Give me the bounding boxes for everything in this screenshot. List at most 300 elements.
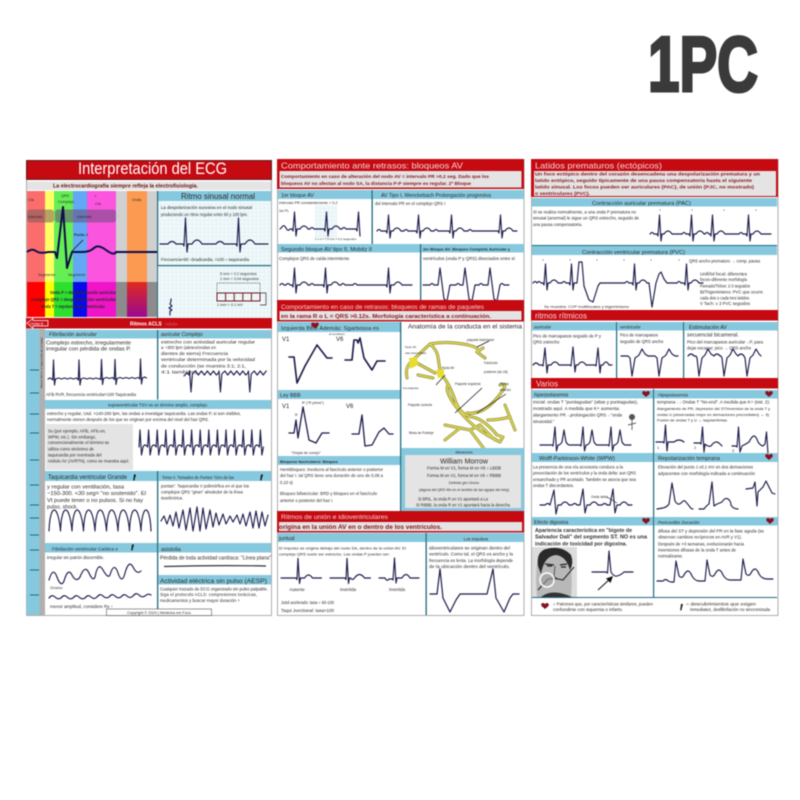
panel: PAC: Contracción auricular prematura (PAC): [592, 201, 691, 207]
trace: LBBB V6: [345, 338, 385, 370]
panel: Taquicardia ventricular: [45, 471, 157, 531]
panel: Efecto digoxina: Efecto digoxina: [534, 520, 568, 526]
panel: Izquierda BBB: V1: [282, 337, 290, 343]
arrow: back tab: [27, 318, 48, 328]
chart: ECG wave segments: Segmento: [38, 273, 55, 277]
trace: RBBB V6: [352, 415, 393, 446]
panel: William Morrow: Si RBBB, la onda R en V1 apuntará hacia la derecha: [416, 502, 511, 508]
trace: ventricular tachycardia: [49, 510, 151, 531]
trace: junctional inverted P after: [330, 558, 370, 584]
panel: Ley BBB: V6: [346, 404, 354, 410]
panel: Anatomía del sistema de conducción: posterior (de LB): [484, 370, 508, 374]
panel: juntual: Taqui Junctional: tasa>100: [281, 608, 335, 613]
legend: confundirse con isquemia o infarto.: [553, 607, 623, 612]
panel: Hipopotasemia: Alargamiento de PR, depresión del ST/inversión de la onda T y: [657, 407, 770, 411]
panel: AV Tipo I Wenckebach: del intervalo PR en el complejo QRS I: [375, 201, 445, 206]
panel: PVC: Unifi/lol focal: diferentes: [700, 272, 747, 276]
subtitle strip: La electrocardiografía siempre refleja la electrofisiología.: [53, 184, 199, 190]
panel: Pericarditis: [654, 517, 778, 582]
panel: Segundo bloque Mobitz II: Segundo bloque AV tipo II, Mobitz II: [281, 247, 372, 253]
heading: bloqueos de ramas de paquetes: [277, 300, 524, 322]
footer: copyright: [106, 609, 212, 616]
arrow: back tab: Ondas B: [30, 322, 44, 326]
title: 1PC: 1PC: [648, 20, 758, 108]
panel: marcapasos ventricular: ventricular: [620, 324, 641, 330]
trace: fine VF: [49, 594, 151, 599]
sidebar: [26, 329, 45, 615]
trace: pericarditis: [657, 559, 773, 582]
icon: heart: [642, 391, 650, 397]
panel: PVC: Pareado/Tiritos: 2-3 seguidos: [700, 284, 750, 288]
chart: ECG wave segments: Intervalo: [28, 215, 43, 219]
panel: Bloqueos fasciculares: Bloqueo bifascicular: BRD y bloqueo en el fascículo: [280, 491, 378, 496]
panel: Fibrilación ventricular: Fibrilación ventricular Caótica e: [52, 546, 119, 552]
subtitle strip: [27, 182, 271, 190]
trace: LBBB V1: [289, 345, 332, 383]
heading: bloqueos AV: [277, 159, 524, 189]
trace: coarse VF: [49, 564, 141, 584]
panel: Ley BBB: R' ("R prime"): [302, 401, 324, 405]
panel: Anatomía del sistema de conducción: Nodo AV: [442, 366, 455, 370]
panel: Bloqueos fasciculares: del haz I. tal QRS tiene una duración de uno de 0,08 a: [280, 473, 384, 478]
panel: PVC: Bi/Trigeminismo: PVC que ocurre: [700, 290, 764, 294]
panel: Anatomía del sistema de conducción: Paquete izquierdo: [455, 382, 481, 386]
trace: PVC: [533, 262, 703, 307]
panel: Ritmo sinusal normal: produciendo un ritmo regular entre 60 y 100 lpm.: [161, 212, 248, 217]
panel: PVC: Contracción ventricular prematura (PVC): [582, 250, 685, 256]
panel: Anatomía del sistema de conducción: los paquete: [403, 386, 419, 390]
panel: William Morrow: Forma M en V1, forma M en V6 = LBDB: [427, 466, 501, 470]
panel: Efecto digoxina: Salvador Dalí" del segmento ST. NO es una: [535, 534, 647, 540]
heading: Ritmos de unión e idioventriculares: [277, 511, 524, 532]
heading: bloqueos de ramas de paquetes: en la rama R o L = QRS >0.12s. Morfología característica a continuación.: [281, 314, 491, 320]
panel: Bloqueos fasciculares: 0,10 s): [280, 480, 293, 485]
icon: lightning: [133, 474, 136, 480]
panel: PAC: Si se realiza normalmente, a una onda P prematura no: [533, 210, 637, 214]
footer: copyright: Copyright © 2024 | Medicina em Foco: [127, 611, 191, 615]
panel: hiperpotasemia: [532, 390, 653, 451]
heading: bloqueos AV: bloqueos AV no afectan al nodo SA, la distancia P-P siempre es regular. 2º Bloque: [281, 181, 471, 186]
trace: atrial fibrillation: [48, 359, 146, 385]
panel: Ley BBB: Ley BBB: [280, 393, 301, 399]
panel: ECG paper scale: [158, 265, 271, 318]
panel: Ritmo sinusal normal: [157, 191, 271, 318]
panel: PVC: cada dos o cada tres latidos.: [700, 296, 750, 300]
heading: bloqueos AV: Comportamiento ante retrasos: bloqueos AV: [281, 160, 463, 170]
trace: junctional absent P: [281, 558, 322, 584]
panel: 1er bloque AV: 1 x s = 7,5 mm = 0,2 segundos: [315, 237, 357, 241]
chart: wave legend strip: Onda T = repolarización ventricular: [41, 304, 105, 309]
icon: heart: [766, 518, 774, 524]
panel: Torsades de Puntes: puntas". Taquicardia V polimórfica en el que los: [161, 484, 249, 488]
panel: Estimulación AV: [684, 322, 778, 376]
panel: 1er bloque AV: [278, 190, 372, 241]
panel: asistolia: Pérdida de toda actividad cardíaca: "Línea plana": [160, 556, 271, 562]
panel: marcapasos auricular: Pico de marcapasos seguido de P y: [533, 334, 602, 338]
panel: WPW: Wolff-Parkinson-White (WPW): [539, 456, 615, 462]
panel: Comportamiento ante retrasos: [277, 159, 524, 616]
panel: idioventriculares: idioventriculares se originan dentro del: [429, 546, 510, 550]
panel: Hipopotasemia: Fusión de ondas T y U → taquiarritmias: [657, 418, 727, 422]
panel: Anatomía del sistema de conducción: anterior: [500, 388, 512, 392]
panel: Anatomía del sistema de conducción: paquete bachmann: [467, 338, 495, 342]
heading: Latidos prematuros: latido ectópico, seguido típicamente de una pausa compensatoria hasta el siguiente: [535, 178, 752, 184]
panel: Anatomía del sistema de conducción: [403, 324, 523, 450]
panel: PAC: una pausa compensatoria.: [533, 222, 582, 227]
panel: Ritmo sinusal normal: La despolarización sucesiva en el nodo sinusal: [161, 205, 252, 210]
panel: Bloqueos fasciculares: Bloqueos fasciculares: Bloqueo: [280, 460, 338, 464]
panel: Ley BBB: "Orejas de conejo": [291, 451, 321, 455]
panel: hiperpotasemia: hiperpotasemia: [534, 392, 568, 398]
panel: PVC: [532, 246, 777, 309]
trace: complete block: [423, 268, 509, 301]
panel: Torsades de Puntes: Torsa V. Torsades de Puntes "Giro de las: [162, 475, 234, 480]
panel: idioventriculares: de la ubicación dentro del ventrículo.: [429, 564, 510, 569]
panel: Taquicardia ventricular: ~150-300. <30 seg= "no sostenido". El: [47, 491, 146, 497]
panel: 3er bloque AV: [422, 244, 524, 301]
panel: Latidos prematuros: [531, 159, 778, 616]
panel: AV Tipo I Wenckebach: [373, 190, 524, 238]
panel: Anatomía del sistema de conducción: Nodo SA: [405, 345, 416, 349]
panel: marcapasos auricular: [532, 322, 616, 373]
panel: Hipopotasemia: 1: [657, 446, 659, 450]
panel: asistolia: asistolia: [161, 547, 182, 553]
panel: marcapasos auricular: auricular: [534, 324, 552, 330]
panel: Estimulación AV: dejar escapar; pico → QRS ancho: [687, 346, 752, 350]
trace: atrial flutter: [184, 371, 266, 392]
panel: Actividad eléctrica sin pulso: Cualquier trazado de ECG organizado sin pulso palpable.: [160, 586, 268, 592]
image: Dalí face: [532, 547, 577, 597]
sidebar: Ritmos ACLS no taquicardia de complejo: [40, 337, 44, 388]
panel: WPW: [532, 453, 653, 514]
panel: Izquierda BBB: [278, 322, 400, 383]
panel: Hipopotasemia: temprana : ↓ Ondas T "No-end". A medida que K+ (sist. 2):: [657, 400, 770, 404]
heading: Latidos prematuros: Latidos prematuros (ectópicos): [535, 160, 662, 170]
panel: juntual: complejo QRS suele ser estrecho. Las ondas P pueden ser:: [279, 552, 390, 556]
panel: Fibrilación ventricular: Grueso: [50, 586, 62, 590]
panel: Estimulación AV: Pico del marcapasos auricular→P, para: [687, 340, 764, 344]
panel: Hipopotasemia: 3: [732, 449, 734, 453]
heading: Ritmos de unión e idioventriculares: Ritmos de unión e idioventriculares: [281, 514, 389, 521]
chart: ECG wave segments: QRS: [61, 194, 70, 198]
heading: Latidos prematuros: o ventriculares (PVC).: [535, 191, 591, 197]
icon: lightning: [260, 474, 263, 480]
panel: William Morrow: Definido giro Onorio: [449, 481, 479, 485]
banner: Ritmos ACLS: [26, 318, 272, 328]
chart: ECG wave segments: Intervalo: [77, 215, 92, 219]
heading: ritmos rítmicos: ritmos rítmicos: [535, 312, 587, 320]
panel: Pericarditis: normalizarse.: [658, 554, 683, 558]
panel: 1er bloque AV: 1er bloque AV: [281, 193, 314, 199]
panel: Bloqueos fasciculares: anterior o posterior del haz I.: [280, 498, 333, 503]
heading: Latidos prematuros: [531, 159, 778, 197]
panel: Torsades de Puntes: isoeléctrica.: [161, 496, 183, 500]
panel: WPW: Onda delta: [591, 495, 608, 499]
panel: marcapasos ventricular: Pico de marcapasos: [620, 332, 658, 338]
heading: Interpretación del ECG: Interpretación del ECG: [78, 159, 227, 178]
panel: Pericarditis: observan cambios recíprocos en AVR y V1).: [658, 534, 742, 540]
panel: Anatomía del sistema de conducción: vías internodales: [405, 351, 427, 355]
arrow: ST sag: [598, 576, 613, 590]
panel: Bloqueos fasciculares: Hemibloqueo: Involucra al fascículo anterior o posterior: [280, 467, 384, 472]
panel: Repolarización temprana: Repolarización temprana: [658, 456, 720, 462]
panel: Aleteo auricular Complejo: ventricular determinada por la velocidad: [161, 357, 255, 362]
trace: early repol 3: [746, 481, 775, 506]
panel: Taquicardia supraventricular: Su (por ejemplo, AFib, AFlu en,: [48, 428, 106, 434]
panel: 3er bloque AV: 3er Bloque AV: Bloqueo Completo Auricular y: [423, 248, 511, 252]
panel: juntual: El impulso se origina debajo del nodo SA, dentro de la unión AV. El: [279, 546, 406, 550]
trace: AV paced: [688, 349, 761, 376]
panel: PVC: V Tach: ≥ 3 PVC seguidos: [700, 301, 750, 306]
trace: digoxin effect: [592, 551, 633, 576]
panel: Segundo bloque Mobitz II: [278, 244, 420, 293]
panel: WPW: ensanchado y PR acortado. También se asocia que sea: [533, 477, 637, 482]
panel: Repolarización temprana: adyacentes con morfología indicada a continuación: [658, 471, 756, 476]
panel: William Morrow: [402, 448, 524, 511]
panel: Hipopotasemia: [654, 390, 778, 454]
panel: WPW: preexcitación de los ventrículos y la onda delta: aun QRS: [533, 470, 636, 476]
panel: PAC: sinusal (anormal) le sigue un QRS estrecho, seguido de: [533, 216, 640, 220]
panel: ECG paper scale: 5 mm = 0.2 segundos: [220, 272, 257, 276]
panel: ECG paper scale: 1 mm = 0.04 segundos: [220, 277, 259, 281]
icon: rose: [628, 414, 636, 430]
icon: lightning: [131, 544, 134, 550]
heading: Interpretación del ECG: [26, 159, 272, 180]
chart: wave legend strip: Complejo QRS = despolarización ventricular: [31, 297, 116, 302]
panel: Actividad eléctrica sin pulso: [158, 575, 271, 603]
legend: = Patrones que, por características similares, pueden: [553, 602, 654, 606]
trace: hypokalemia 3: [732, 427, 768, 454]
panel: Ley BBB: [278, 390, 400, 455]
panel: Pericarditis: Después de >3 semanas, evolucionarán hacia: [658, 542, 745, 546]
panel: idioventriculares: ventrículo. Como tal, el QRS es ancho y la: [429, 552, 514, 556]
panel: Fibrilación ventricular: menor amplitud, considere Rx ↑: [50, 604, 113, 609]
panel: Taquicardia supraventricular: convencionalmente el término se: [48, 440, 110, 445]
divider: [157, 330, 158, 400]
heading: bloqueos de ramas de paquetes: Comportamiento en caso de retrasos: bloqueos de ramas de paquetes: [281, 305, 484, 311]
panel: Taquicardia supraventricular: nódulo AV (AVRTN), como se muestra aquí.: [48, 458, 129, 464]
panel: William Morrow: Forma M en V1, forma M en V6 = RBBB: [427, 473, 501, 478]
panel: Fibrilación auricular: Complejo estrecho, irregularmente: [46, 340, 131, 346]
heading: Varios: [531, 378, 778, 388]
panel: Taquicardia ventricular: Vt puede tener o no pulsos. Si no hay: [47, 498, 143, 504]
legend: inmediatez, desfibrilación no sincronizada: [690, 607, 771, 612]
chart: ECG wave segments: Onda: [132, 198, 142, 202]
banner: Ritmos ACLS: Adulto: [165, 322, 178, 326]
trace: hypokalemia 1: [656, 425, 684, 451]
icon: heart: [541, 603, 549, 609]
heading: Varios: Varios: [536, 380, 558, 388]
heading: Ritmos de unión e idioventriculares: origina en la unión AV en o dentro de los ventrículos.: [279, 525, 442, 531]
panel: Izquierda BBB: el sombrero: [329, 332, 345, 336]
panel: Fibrilación auricular: AFib RVR, frecuencia ventricular>100 Taquicardia: [46, 392, 137, 397]
panel: William Morrow: William Morrow: [440, 458, 489, 466]
panel: William Morrow: Alteraciones: [455, 450, 473, 454]
panel: William Morrow: Si BRIL, la onda R en V1 apuntará a La: [418, 496, 489, 502]
panel: Taquicardia supraventricular: utiliza como sinónimo de: [48, 446, 95, 452]
panel: Aleteo auricular Complejo: de conducción (se muestra 3:1; 2:1,: [161, 364, 246, 368]
panel: hiperpotasemia: mostrado aquí. A medida que K+ aumenta:: [533, 406, 620, 411]
panel: Interpretación del ECG: [26, 159, 272, 616]
trace: junctional inverted P before: [379, 558, 419, 583]
panel: Fibrilación auricular: Fibrilación auricular: [49, 332, 98, 338]
panel: marcapasos ventricular: seguido de QRS ancho: [620, 339, 664, 344]
panel: 1er bloque AV: 1er PL: [279, 209, 289, 213]
panel: idioventriculares: frecuencia es lenta. La morfología depende: [429, 558, 514, 563]
chart: ECG wave segments: Segmento: [68, 273, 85, 277]
icon: heart: [311, 322, 319, 328]
panel: Hipopotasemia: ondas U (observadas mejor en derivaciones precordiales) → 3):: [657, 413, 770, 417]
heading: Latidos prematuros: Un foco ectópico dentro del corazón desencadena una despolarización prematura y un: [535, 172, 760, 178]
trace: early repol 1: [657, 483, 693, 509]
panel: 1er bloque AV: Intervalo PR constantemente > 0,2: [279, 201, 338, 205]
panel: idioventriculares: Los impulsos: [464, 536, 488, 542]
panel: AV Tipo I Wenckebach: AV Tipo I, Wenckebach Prolongación progresiva: [381, 193, 491, 199]
trace: hypokalemia 2: [694, 427, 722, 452]
panel: PVC: Se muestra: CVP multifocales y bigeminismo: [544, 305, 629, 309]
chart: ECG wave segments: Punto J: [74, 233, 88, 237]
panel: Ritmo sinusal normal: Frecuencia<60 =bradicardia, >100 = taquicardia: [161, 257, 250, 262]
panel: Aleteo auricular Complejo: [158, 330, 271, 392]
chart: wave legend strip: Onda P = despolarización auricular: [50, 290, 116, 295]
panel: PAC: [532, 198, 777, 241]
chart: wave legend strip: [27, 282, 157, 317]
panel: Aleteo auricular Complejo: a ~300 lpm (aleteo/ondas en: [161, 345, 216, 350]
trace: WPW: [540, 489, 632, 514]
panel: Fibrilación ventricular: [45, 543, 157, 609]
trace: Mobitz II: [280, 268, 412, 293]
panel: hiperpotasemia: sinusoidal.": [533, 419, 555, 424]
panel: Aleteo auricular Complejo: dientes de sierra) Frecuencia: [161, 351, 228, 356]
panel: asistolia: [158, 543, 271, 566]
panel: hiperpotasemia: alargamiento PR→prolongación QRS→"onda: [533, 412, 623, 418]
chart: ECG wave segments: Cta: [28, 198, 35, 202]
panel: Anatomía del sistema de conducción: Fascículo: [484, 361, 498, 365]
panel: Ley BBB: V1: [282, 404, 290, 410]
panel: Fibrilación ventricular: irregular sin patrón discernible.: [47, 555, 104, 560]
trace: first degree block: [280, 212, 360, 236]
chart: ECG wave segments: [27, 191, 157, 282]
panel: juntual: juntual: [278, 536, 295, 542]
icon: heart: [765, 391, 773, 397]
trace: Wenckebach: [377, 215, 517, 238]
panel: 3er bloque AV: ventrículos (onda P y QRS) disociados entre sí: [423, 256, 516, 261]
panel: Estimulación AV: secuencial bicameral.: [687, 332, 739, 338]
trace: normal sinus rhythm: [160, 218, 268, 252]
panel: Actividad eléctrica sin pulso: Actividad eléctrica sin pulso (AESP): [160, 578, 267, 585]
panel: Taquicardia supraventricular: [45, 400, 271, 470]
panel: marcapasos auricular: QRS estrecho: [533, 340, 560, 344]
panel: Aleteo auricular Complejo: 4:1 también).: [161, 370, 199, 374]
legend: [532, 597, 777, 612]
panel: William Morrow: (alguna del QRS Wo en el sentido de las agujas del reloj): [419, 488, 509, 492]
panel: Segundo bloque Mobitz II: Complejos QRS de caída intermitente: [279, 256, 350, 261]
panel: Fibrilación auricular: irregular con pérdida de ondas P.: [46, 346, 131, 352]
trace: RBBB V1: [289, 407, 329, 443]
panel: Taquicardia supraventricular: supraventricular TSV es un término amplio, complejo.: [108, 402, 208, 408]
panel: ECG paper scale: 1 mm = 0.1 mV: [217, 303, 243, 307]
panel: Taquicardia supraventricular: normalmente vienen después de los que se originan por encima del nivel del haz QRS.: [47, 417, 209, 422]
panel: Anatomía del sistema de conducción: Paquete conecta: [408, 403, 432, 407]
panel: Ritmo sinusal normal: Ritmo sinusal normal: [181, 192, 255, 201]
panel: Actividad eléctrica sin pulso: medicamentos y buscar mayor duración +: [160, 598, 241, 603]
panel: PVC: QRS ancho prematuro → comp. pausa: [689, 258, 761, 264]
panel: idioventriculares: [427, 533, 524, 612]
panel: Efecto digoxina: Apariencia característica en "bigote de: [535, 528, 632, 534]
panel: Hipopotasemia: 2: [694, 446, 696, 450]
panel: Izquierda BBB: Izquierda BBB Además: Sgarbossa es: [281, 326, 379, 332]
panel: hiperpotasemia: Inicial: ondas T "puntiagudas" (altas y puntiagudas),: [533, 400, 638, 404]
icon: heart: [642, 518, 650, 524]
panel: juntual: Invertida: [389, 587, 406, 592]
heading: bloqueos AV: Comportamiento en caso de alteración del nodo AV = intervalo PR >0.2 seg. Dado que los: [281, 174, 489, 179]
panel: Taquicardia ventricular: Taquicardia ventricular Grande: [48, 475, 128, 481]
trace: early repol 2: [699, 482, 738, 509]
panel: Ley BBB: R: [295, 413, 298, 417]
panel: Taquicardia supraventricular: estrecho y regular, Usd. >140-260 lpm, las ondas a investigar taquicardia. Las ondas P, si son visibles,: [47, 411, 241, 416]
panel: Torsades de Puntes: [158, 471, 271, 531]
trace: ventricular paced: [621, 349, 678, 376]
panel: Hipopotasemia: Hipopotasemia: [658, 392, 689, 398]
panel: PVC: focos=diferente morfología: [700, 277, 748, 282]
panel: Pericarditis: Pericarditis Duración: [658, 520, 700, 525]
panel: Taquicardia supraventricular: WPW, etc.). Sin embargo,: [48, 434, 96, 440]
trace: SVT: [139, 430, 263, 455]
diagram: conduction system: [406, 342, 515, 450]
panel: Efecto digoxina: [532, 517, 653, 597]
icon: heart: [765, 454, 773, 460]
panel: Anatomía del sistema de conducción: Rama: [500, 382, 509, 386]
panel: Estimulación AV: Estimulación AV: [689, 325, 727, 331]
panel: Repolarización temprana: [654, 453, 778, 509]
trace: atrial paced: [533, 347, 612, 373]
trace: hyperkalemia: [540, 427, 631, 451]
panel: juntual: Jutol acelerado: tasa = 60-100: [281, 600, 335, 605]
panel: Taquicardia ventricular: y regular con ventilación, tasa: [47, 484, 124, 490]
panel: Fibrilación auricular: [45, 330, 157, 397]
panel: juntual: [278, 533, 426, 613]
panel: Taquicardia ventricular: pulso, shock.: [47, 504, 78, 510]
panel: Repolarización temprana: Elevación del punto J ≥0,1 mV en dos derivaciones: [658, 464, 753, 470]
chart: ECG wave segments: t: [95, 194, 97, 198]
chart: ECG wave segments: Cta: [95, 202, 102, 206]
panel: Aleteo auricular Complejo: estrecho con actividad auricular regular: [161, 340, 256, 344]
panel: Anatomía del sistema de conducción: fibras de Purkinje: [409, 431, 434, 435]
trace: torsades: [161, 507, 268, 531]
panel: Actividad eléctrica sin pulso: Siga el protocolo ACLS: compresiones torácicas,: [160, 592, 257, 597]
panel: Pericarditis: inversiones difusas de la onda T antes de: [658, 548, 737, 552]
heading: ritmos rítmicos: [531, 310, 778, 320]
panel: WPW: ondas T discordantes.: [533, 483, 574, 488]
divider: [157, 471, 158, 609]
heading: Latidos prematuros: latido sinusal. Los focos pueden ser auriculares (PAC), de unión (PJC, no mostrado): [535, 184, 754, 190]
panel: juntual: Ausente: [289, 587, 305, 592]
panel: Bloqueos fasciculares: [278, 456, 400, 503]
panel: Efecto digoxina: indicación de toxicidad por digoxina.: [535, 542, 628, 548]
trace: PAC: [650, 215, 771, 241]
chart: ECG wave segments: Complejo: [58, 200, 74, 204]
trace: idioventricular rhythm: [430, 569, 519, 612]
panel: Pericarditis: difusa del ST y depresión del PR en la fase aguda (se: [658, 528, 765, 534]
panel: Aleteo auricular Complejo: auricular Complejo: [161, 332, 203, 338]
panel: juntual: Invertida: [340, 587, 357, 592]
legend: = descubrimientos que exigen: [686, 602, 757, 606]
banner: Ritmos ACLS: Ritmos ACLS: [130, 322, 162, 328]
panel: Anatomía del sistema de conducción: Anatomía de la conducta en el sistema: [408, 324, 523, 330]
panel: Taquicardia supraventricular: taquicardia por reentrada del: [48, 452, 102, 458]
panel: Izquierda BBB: V6: [336, 337, 344, 343]
panel: marcapasos ventricular: [618, 322, 683, 376]
